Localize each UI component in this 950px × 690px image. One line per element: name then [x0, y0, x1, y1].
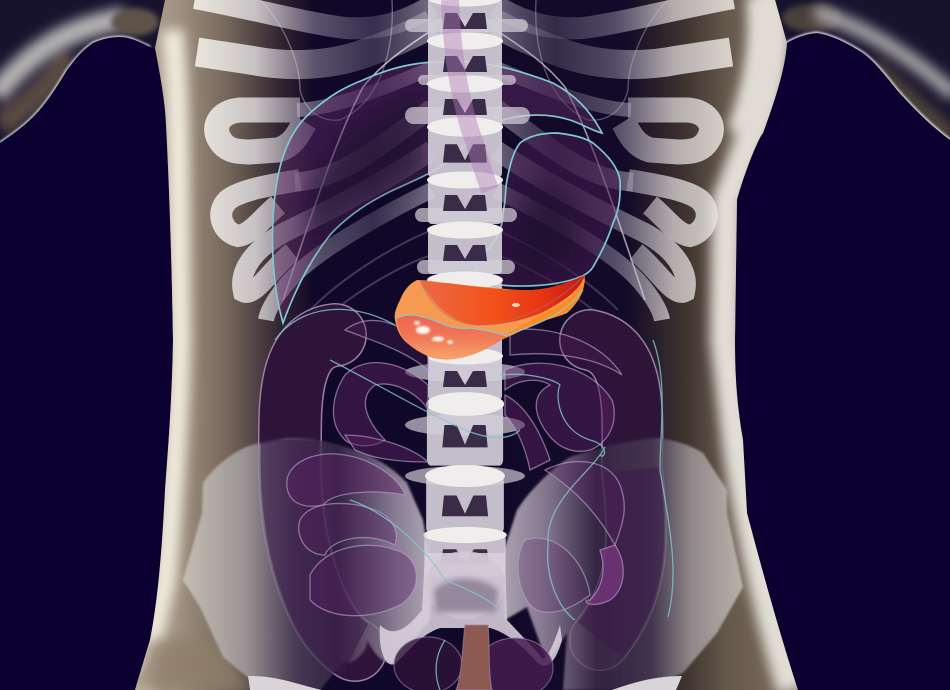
pancreas base orange	[395, 275, 585, 360]
rectum	[456, 625, 492, 690]
lower tan patch	[130, 640, 250, 690]
right colon	[590, 340, 636, 640]
splenic vein line	[420, 275, 585, 325]
vessel pelvic left	[350, 500, 500, 610]
right colon outline	[590, 340, 636, 640]
blood vessels	[275, 309, 673, 690]
ribs: patient left side	[496, 0, 733, 320]
bowel loop upper left	[333, 363, 428, 446]
sacrum body	[425, 551, 505, 619]
colon outer line right	[653, 340, 673, 617]
torso fill	[130, 0, 810, 690]
colon	[290, 335, 636, 650]
right shoulder brown	[782, 4, 842, 32]
right arm bright band	[815, 12, 950, 95]
vessel left	[330, 360, 520, 438]
sacrum	[380, 553, 562, 666]
pubic bone right	[612, 676, 682, 690]
lower vertebrae	[405, 348, 525, 577]
esophagus	[450, 0, 490, 190]
transverse processes	[405, 19, 530, 274]
lower loops right	[477, 638, 553, 690]
small bowel	[287, 320, 624, 616]
pancreas vein line	[397, 290, 583, 336]
glaze right	[600, 470, 636, 640]
white flecks	[414, 321, 453, 344]
lower bowel	[394, 625, 553, 690]
left arm bright band	[0, 18, 125, 95]
spine	[405, 0, 530, 577]
sacral shadow	[434, 579, 498, 612]
vessel right descending	[548, 447, 605, 620]
right arm lower brown	[870, 68, 950, 140]
bowel top left	[345, 320, 428, 370]
rectal vessel	[436, 640, 445, 690]
pubic bone left	[248, 676, 322, 690]
right edge highlight	[725, 0, 792, 690]
stomach	[470, 133, 620, 286]
colon top line	[275, 309, 395, 340]
right arm	[770, 0, 950, 150]
bowel top right	[510, 329, 622, 375]
lower lobe	[397, 315, 507, 359]
lumbar transverse processes	[405, 362, 525, 486]
stomach dark centre	[515, 189, 576, 275]
right shoulder highlight	[745, 0, 767, 135]
upper vertebrae	[405, 0, 530, 364]
underside bright orange	[500, 278, 585, 340]
liver dark centre	[310, 95, 425, 250]
left arm	[0, 0, 165, 143]
sigmoid lobes right	[545, 462, 624, 545]
mesenteric branch right	[500, 374, 604, 456]
bowel loop mid left	[345, 435, 428, 462]
pancreas	[395, 275, 585, 360]
torso body	[130, 0, 810, 690]
bowel loop mid right	[505, 395, 550, 470]
liver	[272, 61, 602, 323]
left colon outline	[290, 335, 355, 650]
left colon	[290, 335, 355, 650]
left pelvis	[183, 438, 432, 690]
right arm edge highlight	[785, 33, 950, 140]
ribs: patient right side	[195, 0, 432, 320]
bowel loop upper right	[505, 363, 614, 451]
sigmoid lobes left	[287, 454, 405, 506]
left arm base	[0, 0, 165, 142]
left arm lower brown	[0, 55, 70, 125]
sacrum and pubic arch	[248, 551, 682, 690]
rib cage	[195, 0, 733, 320]
right arm base	[775, 0, 950, 124]
lower loops left	[394, 637, 462, 690]
left shoulder brown	[111, 8, 159, 36]
colon re-glaze over pelvis	[290, 440, 636, 650]
left edge highlight	[140, 30, 180, 690]
upper lobe	[420, 275, 585, 325]
right highlights	[512, 303, 520, 307]
glaze left	[290, 440, 355, 650]
left arm edge highlight	[0, 37, 150, 143]
right pelvis	[503, 438, 743, 690]
